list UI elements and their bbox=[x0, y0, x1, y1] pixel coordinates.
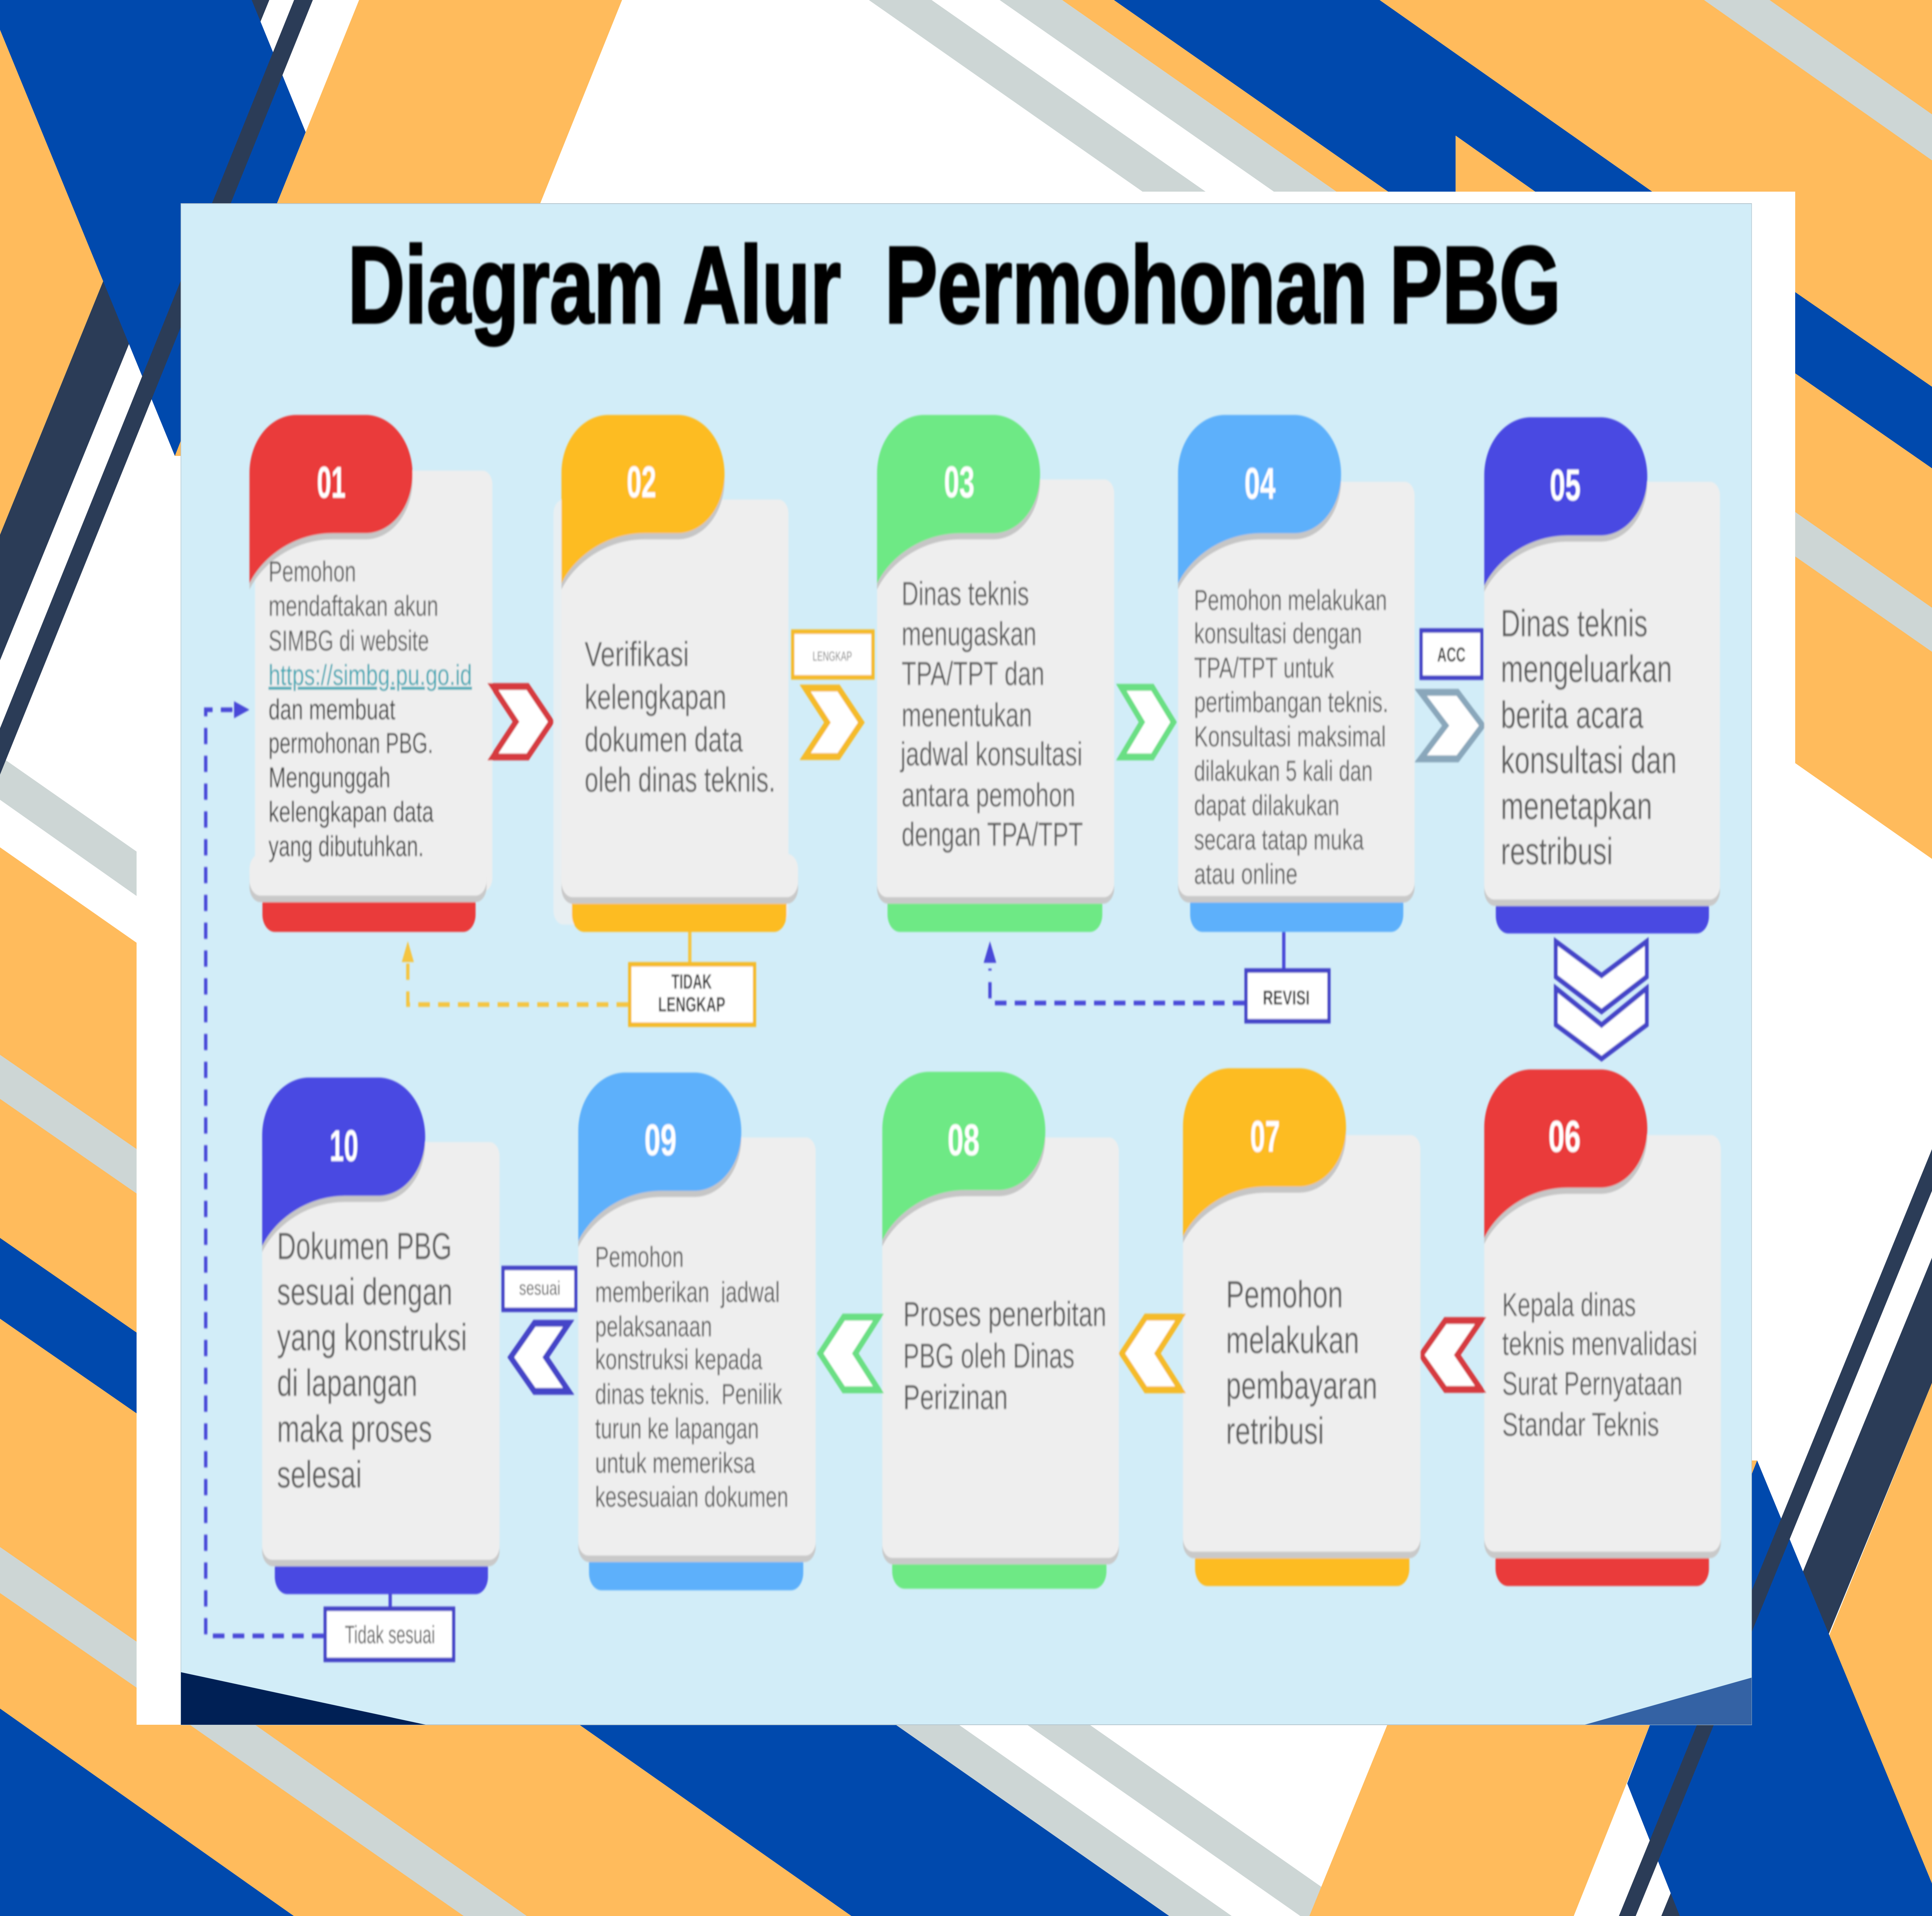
card 07 text bbox=[1226, 1273, 1378, 1452]
card 03 bottom bar bbox=[888, 881, 1102, 932]
card 06 number tab: 06 bbox=[1548, 1112, 1581, 1161]
label: lengkap bbox=[793, 632, 873, 677]
card 01 text: mendaftakan akun bbox=[269, 590, 439, 622]
card 01 text: https://simbg.pu.go.id bbox=[269, 659, 472, 691]
card 05 body bbox=[1484, 482, 1720, 906]
card 01 text: kelengkapan data bbox=[269, 796, 434, 828]
card 03 text: jadwal konsultasi bbox=[900, 735, 1082, 772]
background: bottom-right geometric corner bbox=[1310, 1149, 1932, 1916]
card 04 text: TPA/TPT untuk bbox=[1194, 651, 1334, 684]
card 03 text: menentukan bbox=[901, 696, 1032, 733]
card 09 body bbox=[578, 1137, 816, 1562]
card 08 text bbox=[903, 1294, 1106, 1417]
card 06 text: Surat Pernyataan bbox=[1502, 1365, 1682, 1402]
card 04 bbox=[1178, 415, 1415, 932]
card 07 number tab: 07 bbox=[1250, 1112, 1280, 1161]
card 04 bottom bar bbox=[1190, 881, 1403, 932]
arrow: 03 to 04 bbox=[1121, 687, 1173, 757]
card 01 body bbox=[250, 471, 492, 902]
card 08 bbox=[882, 1072, 1119, 1589]
arrow: 02 to 03 bbox=[805, 688, 861, 757]
card 07 text: Pemohon bbox=[1226, 1273, 1343, 1316]
arrow: 07 to 08 bbox=[1122, 1317, 1180, 1390]
label: sesuai: sesuai bbox=[519, 1278, 560, 1299]
dashed connector: tidak sesuai back to step 01 bbox=[206, 701, 390, 1636]
card 06 text: Kepala dinas bbox=[1502, 1286, 1636, 1323]
card 02 number tab: 02 bbox=[627, 458, 656, 507]
card 10 text: sesuai dengan bbox=[277, 1271, 452, 1313]
card 04 text: secara tatap muka bbox=[1194, 823, 1364, 856]
card 02 pale back sheet bbox=[553, 500, 788, 925]
panel: light-blue diagram panel bbox=[181, 204, 1752, 1725]
card 02 number tab bbox=[561, 415, 724, 590]
label: tidak lengkap: LENGKAP bbox=[658, 993, 725, 1016]
panel corner: blue wedge bottom right bbox=[1585, 1678, 1752, 1725]
card 05 text: mengeluarkan bbox=[1501, 648, 1672, 690]
card 04 text: Konsultasi maksimal bbox=[1194, 720, 1386, 753]
card 03 bbox=[877, 415, 1114, 932]
card 10 text bbox=[277, 1225, 467, 1496]
card 04 text: dilakukan 5 kali dan bbox=[1194, 755, 1373, 787]
card 01 text: yang dibutuhkan. bbox=[269, 830, 424, 862]
arrow: 04 to 05 bbox=[1421, 692, 1483, 759]
card 03 text: antara pemohon bbox=[901, 776, 1075, 813]
card 10 number tab bbox=[262, 1078, 425, 1252]
card 08 number tab bbox=[882, 1072, 1045, 1246]
card 02 bbox=[553, 415, 798, 932]
card 09 text: untuk memeriksa bbox=[595, 1447, 755, 1479]
card 01 text bbox=[269, 555, 472, 862]
card 04 number tab bbox=[1178, 415, 1341, 590]
card 06 text: teknis menvalidasi bbox=[1502, 1325, 1697, 1362]
card 03 text: Dinas teknis bbox=[901, 575, 1029, 612]
card 08 text: Perizinan bbox=[903, 1377, 1008, 1417]
card 02 bottom bar bbox=[572, 881, 786, 932]
card 07 body bbox=[1183, 1135, 1420, 1558]
card 01 text: Mengunggah bbox=[269, 761, 391, 794]
card 04 text: konsultasi dengan bbox=[1194, 617, 1362, 649]
background: left and bottom stripes bbox=[0, 756, 1363, 1916]
card 09 text: turun ke lapangan bbox=[595, 1412, 759, 1445]
card 06 text bbox=[1502, 1286, 1697, 1443]
label: revisi bbox=[1246, 971, 1329, 1021]
label: tidak sesuai: Tidak sesuai bbox=[345, 1620, 435, 1649]
card 03 body bbox=[877, 479, 1114, 904]
label: acc bbox=[1421, 631, 1482, 678]
card 04 text: Pemohon melakukan bbox=[1194, 584, 1387, 616]
card 02 text: kelengkapan bbox=[585, 677, 726, 717]
background: top-right orange field with stripes bbox=[1379, 0, 1932, 859]
card 05 number tab: 05 bbox=[1550, 461, 1581, 510]
card 10 bbox=[262, 1078, 500, 1594]
card 08 text: Proses penerbitan bbox=[903, 1294, 1106, 1334]
card 05 text: Dinas teknis bbox=[1501, 602, 1648, 645]
card 03 text: TPA/TPT dan bbox=[901, 655, 1044, 692]
card 01 text: dan membuat bbox=[269, 693, 395, 726]
title: Diagram Alur Permohonan PBG bbox=[348, 224, 1561, 346]
card 05 text: menetapkan bbox=[1501, 785, 1652, 828]
card 03 number tab bbox=[877, 415, 1040, 590]
card 02 text bbox=[585, 634, 776, 799]
card 03 text: menugaskan bbox=[901, 615, 1036, 652]
card 09 number tab bbox=[578, 1073, 741, 1247]
card 05 text bbox=[1501, 602, 1677, 873]
card 01 text: SIMBG di website bbox=[269, 624, 429, 657]
card 05 text: restribusi bbox=[1501, 830, 1613, 873]
card 02 text: Verifikasi bbox=[585, 634, 689, 674]
card 02 text: oleh dinas teknis. bbox=[585, 760, 776, 799]
background: top-left geometric corner bbox=[0, 0, 622, 775]
label: tidak sesuai bbox=[325, 1609, 454, 1660]
card 10 number tab: 10 bbox=[330, 1122, 358, 1171]
arrow: 05 down to 06 bbox=[1556, 942, 1647, 1059]
card 07 bbox=[1183, 1068, 1420, 1586]
card 10 text: yang konstruksi bbox=[277, 1316, 467, 1359]
card 04 text: dapat dilakukan bbox=[1194, 789, 1339, 821]
card 06 body bbox=[1484, 1135, 1721, 1558]
card 02 body bbox=[561, 500, 798, 904]
card 01 bbox=[250, 415, 492, 932]
card 05 bbox=[1484, 417, 1720, 933]
card 04 text bbox=[1194, 584, 1388, 890]
card 07 text: melakukan bbox=[1226, 1319, 1359, 1362]
card 09 text: dinas teknis. Penilik bbox=[595, 1378, 782, 1410]
card 01 bottom bar bbox=[262, 881, 476, 932]
card 10 text: selesai bbox=[277, 1454, 362, 1496]
card 07 text: retribusi bbox=[1226, 1410, 1324, 1452]
card 10 bottom bar bbox=[275, 1530, 488, 1594]
arrow: 01 to 02 bbox=[493, 687, 551, 757]
arrow: 08 to 09 bbox=[820, 1317, 878, 1390]
diagram content bbox=[206, 224, 1721, 1660]
card 10 body bbox=[262, 1142, 500, 1566]
card 09 bottom bar bbox=[589, 1530, 803, 1590]
card 09 text bbox=[595, 1241, 788, 1513]
card 05 bottom bar bbox=[1496, 881, 1709, 933]
card 06 bottom bar bbox=[1495, 1530, 1709, 1586]
label: tidak lengkap: TIDAK bbox=[671, 970, 712, 993]
card 07 number tab bbox=[1183, 1068, 1346, 1243]
card 04 text: pertimbangan teknis. bbox=[1194, 686, 1388, 718]
card 09 number tab: 09 bbox=[645, 1116, 677, 1165]
card 08 bottom bar bbox=[892, 1530, 1106, 1589]
dashed connector: tidak lengkap back to step 01 bbox=[402, 932, 690, 1005]
card 04 number tab: 04 bbox=[1244, 459, 1276, 508]
card 09 bbox=[578, 1073, 816, 1590]
card 06 bbox=[1484, 1069, 1721, 1586]
card 08 number tab: 08 bbox=[947, 1116, 980, 1165]
arrow: 09 to 10 bbox=[511, 1323, 569, 1391]
card 01 text: Pemohon bbox=[269, 555, 356, 588]
label: lengkap: LENGKAP bbox=[813, 649, 852, 664]
card 02 text: dokumen data bbox=[585, 720, 743, 759]
panel corner: navy wedge bottom left bbox=[181, 1672, 426, 1725]
card 08 body bbox=[882, 1137, 1119, 1564]
card 09 text: kesesuaian dokumen bbox=[595, 1481, 788, 1513]
card 03 number tab: 03 bbox=[944, 458, 975, 507]
label: acc: ACC bbox=[1437, 643, 1466, 666]
label: sesuai bbox=[503, 1268, 576, 1310]
card 04 text: atau online bbox=[1194, 858, 1298, 890]
card 01 number tab bbox=[250, 415, 413, 590]
label: tidak lengkap bbox=[630, 964, 755, 1025]
card 05 text: konsultasi dan bbox=[1501, 739, 1677, 782]
card 09 text: konstruksi kepada bbox=[595, 1343, 763, 1375]
card 01 text: permohonan PBG. bbox=[269, 727, 433, 759]
card 05 number tab bbox=[1484, 417, 1647, 592]
card 01 number tab: 01 bbox=[317, 458, 345, 507]
dashed connector: revisi back to step 03 bbox=[984, 932, 1284, 1003]
card 09 text: Pemohon bbox=[595, 1241, 684, 1273]
card 04 body bbox=[1178, 482, 1415, 903]
card 10 text: Dokumen PBG bbox=[277, 1225, 452, 1268]
card 07 text: pembayaran bbox=[1226, 1365, 1378, 1407]
card 05 text: berita acara bbox=[1501, 694, 1644, 736]
card 08 text: PBG oleh Dinas bbox=[903, 1336, 1075, 1375]
card 03 text: dengan TPA/TPT bbox=[901, 816, 1083, 853]
card 06 text: Standar Teknis bbox=[1502, 1406, 1659, 1443]
card 09 text: memberikan jadwal bbox=[595, 1276, 780, 1308]
background: top stripes bbox=[869, 0, 1652, 192]
white frame around the panel bbox=[136, 192, 1795, 1725]
card 03 text bbox=[900, 575, 1083, 853]
card 07 bottom bar bbox=[1195, 1530, 1409, 1586]
card 10 text: di lapangan bbox=[277, 1362, 417, 1404]
arrow: 06 to 07 bbox=[1421, 1321, 1481, 1389]
card 10 text: maka proses bbox=[277, 1408, 432, 1450]
card 06 number tab bbox=[1484, 1069, 1647, 1244]
card 09 text: pelaksanaan bbox=[595, 1310, 712, 1343]
label: revisi: REVISI bbox=[1263, 986, 1310, 1009]
